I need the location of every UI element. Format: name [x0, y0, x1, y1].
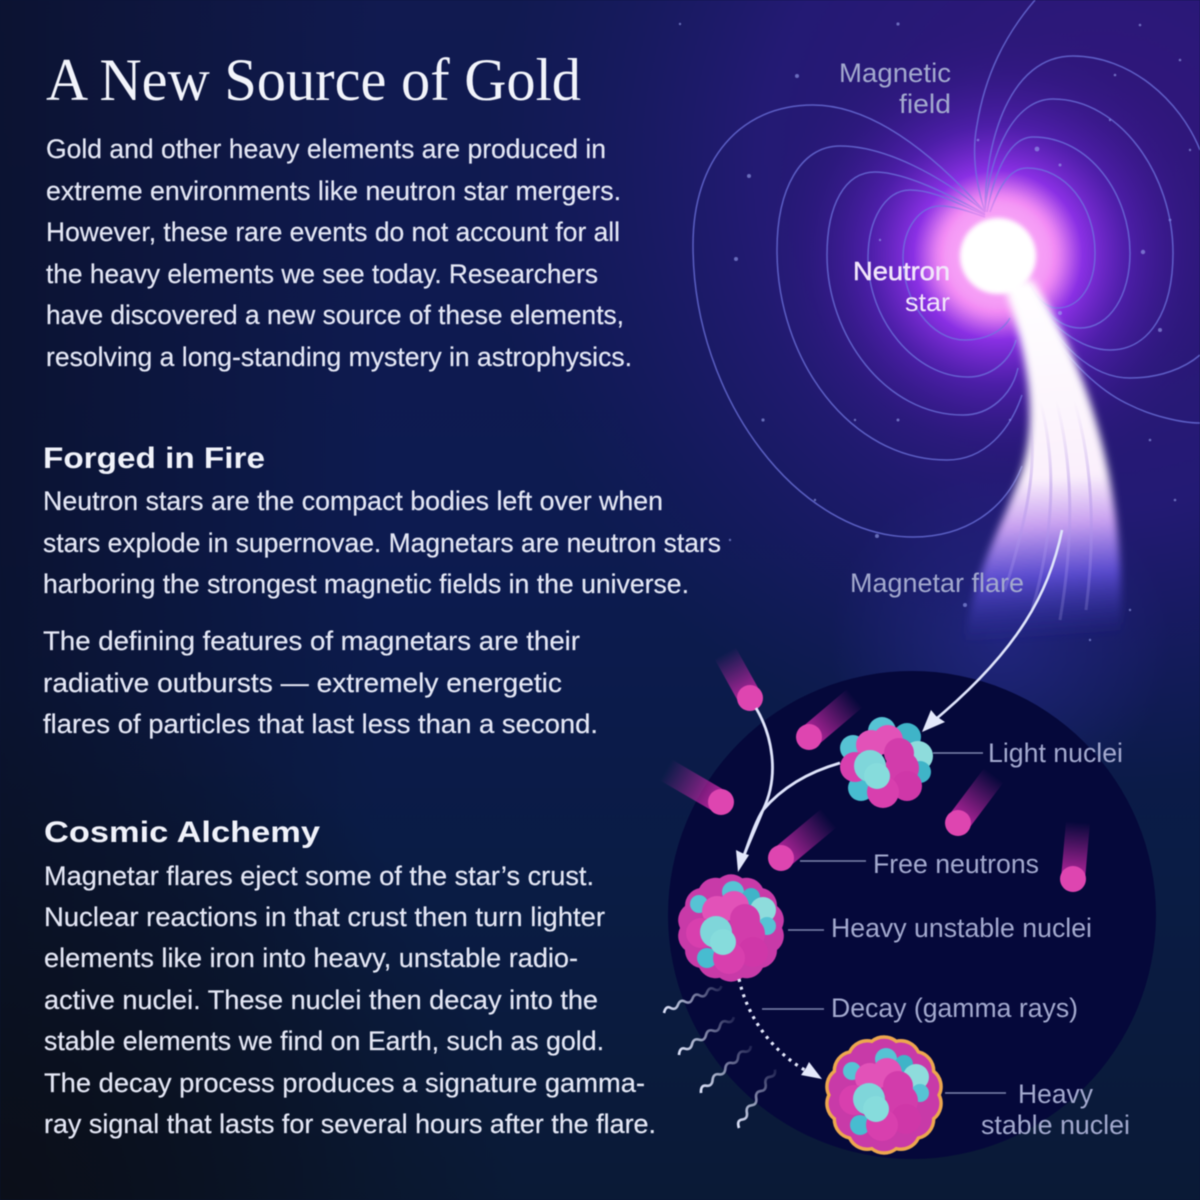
bottom-left shade [0, 680, 520, 1200]
cosmic alchemy text: Nuclear reactions in that crust then turn lighter [44, 902, 605, 932]
cosmic alchemy text: stable elements we find on Earth, such as gold. [44, 1026, 604, 1056]
label: heavy stable nuclei [981, 1079, 1130, 1140]
label: heavy unstable nuclei: Heavy unstable nuclei [831, 913, 1092, 943]
neutron 3 [666, 770, 734, 815]
forged in fire text: stars explode in supernovae. Magnetars are neutron stars [43, 528, 721, 558]
forged in fire text: The defining features of magnetars are their [43, 626, 580, 656]
label: magnetic field: Magnetic [839, 58, 951, 88]
cosmic alchemy text: ray signal that lasts for several hours after the flare. [44, 1109, 656, 1139]
ray 2 [674, 1016, 738, 1055]
label: magnetic field: field [899, 89, 951, 119]
gamma rays [661, 985, 783, 1128]
intro paragraph: However, these rare events do not account for all [46, 217, 620, 247]
intro paragraph: extreme environments like neutron star mergers. [46, 176, 621, 206]
light nucleus [840, 717, 933, 808]
magnetic field lines [693, 0, 1200, 537]
cosmic alchemy text: Magnetar flares eject some of the star’s crust. [44, 861, 594, 891]
arrows: into heavy nuclei [736, 708, 840, 872]
decay dotted arrow [739, 979, 822, 1079]
arrow: flare to light nuclei [922, 530, 1062, 732]
purple sky [0, 0, 1200, 900]
cosmic alchemy text: The decay process produces a signature gamma- [44, 1068, 645, 1098]
cosmic alchemy text: elements like iron into heavy, unstable radio- [44, 943, 578, 973]
intro paragraph [46, 134, 632, 372]
intro paragraph: have discovered a new source of these elements, [46, 300, 624, 330]
label: magnetic field [839, 58, 951, 119]
nuclear reaction circle [668, 671, 1156, 1159]
label: heavy stable nuclei: Heavy [1018, 1079, 1094, 1109]
heavy stable nucleus [827, 1037, 941, 1153]
heading: cosmic alchemy: Cosmic Alchemy [44, 816, 320, 849]
forged in fire text: harboring the strongest magnetic fields in the universe. [43, 569, 689, 599]
label: neutron star: Neutron [853, 256, 950, 286]
star field [679, 22, 1191, 641]
magnetar flare [965, 280, 1121, 640]
label: light nuclei: Light nuclei [988, 738, 1123, 768]
ray 4 [731, 1069, 783, 1128]
ray 3 [695, 1045, 757, 1093]
label: neutron star: star [905, 287, 950, 317]
label: free neutrons: Free neutrons [873, 849, 1039, 879]
label: heavy stable nuclei: stable nuclei [981, 1110, 1130, 1140]
forged in fire text [43, 486, 721, 739]
purple glow [760, 20, 1200, 490]
ray 1 [661, 985, 724, 1013]
neutron 5 [945, 775, 994, 836]
lower glow [800, 450, 1200, 830]
neutron 2 [796, 698, 855, 750]
diagram labels [831, 58, 1130, 1140]
star glow halo [940, 197, 1056, 313]
left shade [0, 0, 380, 1200]
forged in fire text: Neutron stars are the compact bodies left over when [43, 486, 663, 516]
star core [960, 218, 1036, 294]
leader lines [762, 753, 1006, 1093]
heading: forged in fire: Forged in Fire [43, 442, 265, 475]
cosmic alchemy text: active nuclei. These nuclei then decay into the [44, 985, 598, 1015]
label: decay: Decay (gamma rays) [831, 993, 1078, 1023]
neutron 1 [725, 653, 763, 711]
label: neutron star [853, 256, 950, 317]
intro paragraph: resolving a long-standing mystery in astrophysics. [46, 342, 632, 372]
intro paragraph: the heavy elements we see today. Researchers [46, 259, 598, 289]
forged in fire text: flares of particles that last less than a second. [43, 709, 598, 739]
neutron 6 [1060, 822, 1086, 892]
intro paragraph: Gold and other heavy elements are produced in [46, 134, 606, 164]
heavy unstable nucleus [678, 874, 784, 982]
label: magnetar flare: Magnetar flare [850, 568, 1024, 598]
title: A New Source of Gold [46, 47, 581, 113]
cosmic alchemy text [44, 861, 656, 1139]
forged in fire text: radiative outbursts — extremely energetic [43, 668, 562, 698]
neutron 4 [768, 818, 829, 871]
free neutrons [666, 653, 1086, 892]
